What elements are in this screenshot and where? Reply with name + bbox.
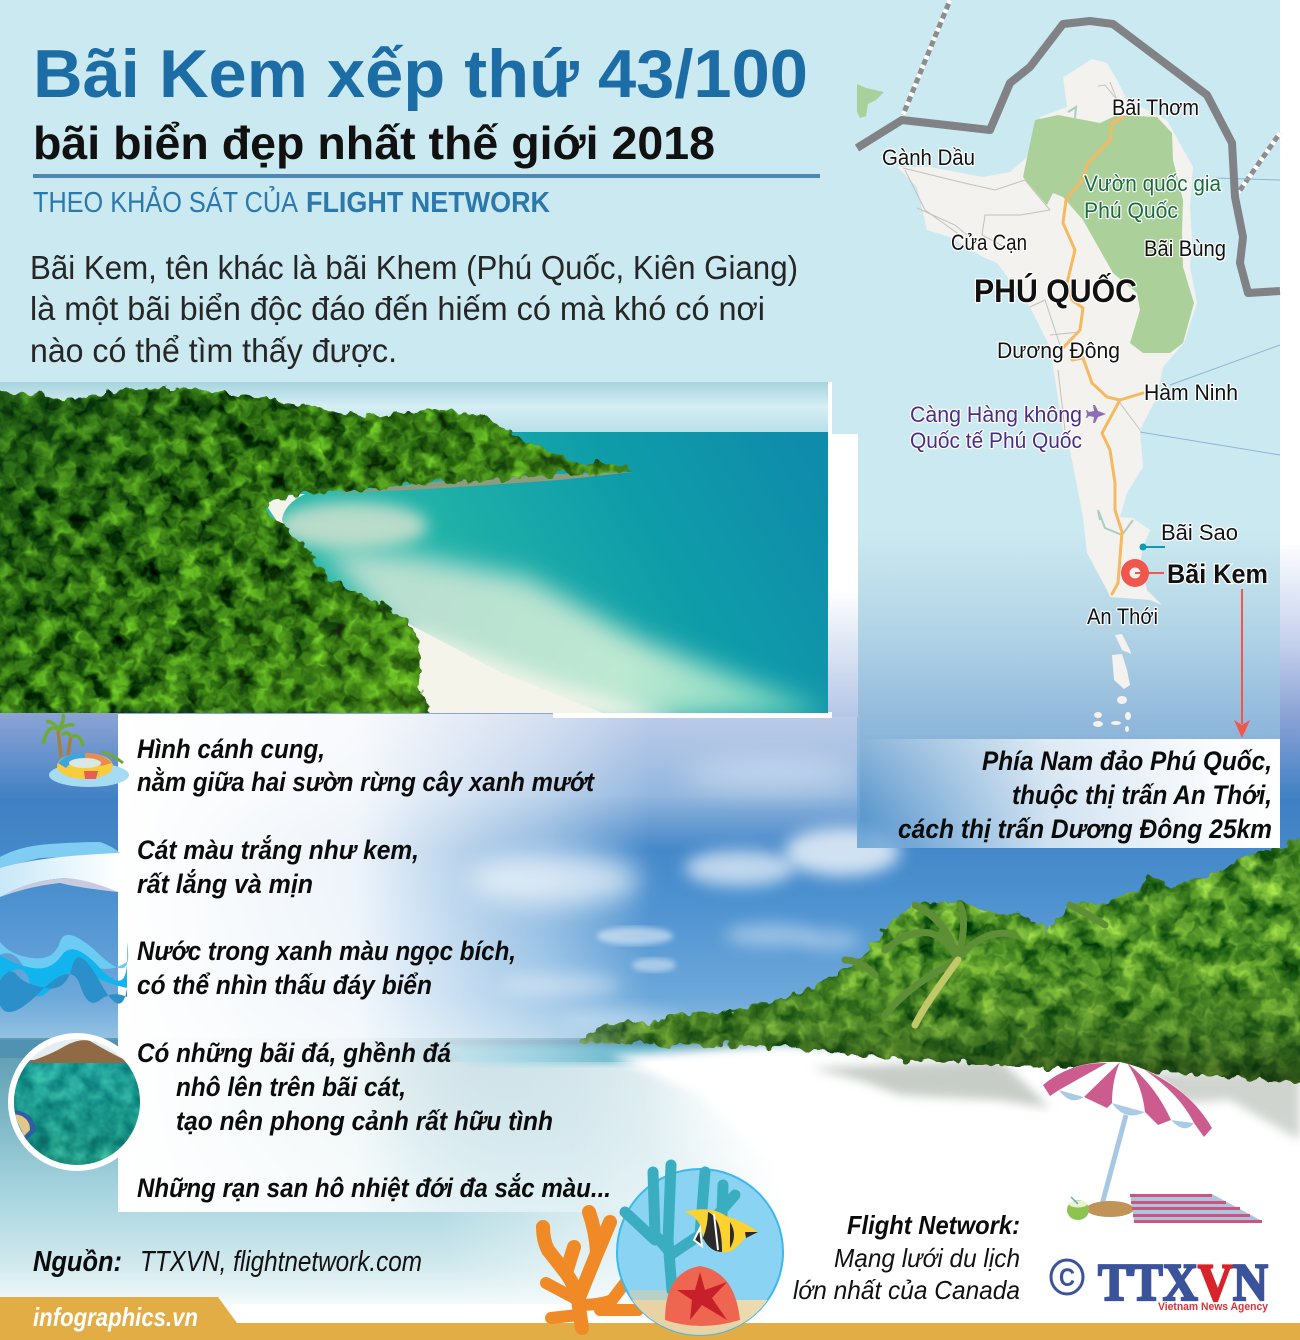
- intro text: [30, 249, 798, 369]
- text: feature list: [137, 734, 611, 1203]
- shallow water: [276, 502, 828, 720]
- text: feature list: có thể nhìn thấu đáy biển: [137, 970, 432, 1000]
- canopy: [1043, 1062, 1212, 1137]
- map labels: Quốc tế Phú Quốc: [910, 428, 1082, 453]
- background: sky and beach photo: [0, 540, 1300, 1320]
- text: Flight Network note: [793, 1210, 1020, 1305]
- subtitle: bãi biển đẹp nhất thế giới 2018: [33, 117, 715, 169]
- border line: [857, 21, 1280, 293]
- white sand beach: [620, 1090, 1300, 1320]
- palm trees: [845, 905, 1105, 1025]
- coconut: [1067, 1197, 1089, 1220]
- text: feature list: Có những bãi đá, ghềnh đá: [137, 1038, 451, 1068]
- marker: Bãi Kem: Bãi Kem: [1167, 559, 1268, 589]
- white frame behind photo: [553, 382, 858, 718]
- icon: airplane: [1086, 405, 1106, 423]
- small island: [857, 84, 884, 118]
- towel: [1086, 1194, 1262, 1223]
- minor roads and rivers: [903, 82, 1140, 535]
- source: [33, 1246, 422, 1278]
- footer bar: [0, 1297, 1300, 1340]
- map: Phú Quốc island: [857, 0, 1280, 732]
- text: feature list: nằm giữa hai sườn rừng cây xanh mướt: [137, 766, 595, 797]
- pole: [1100, 1115, 1126, 1212]
- island: [897, 59, 1197, 605]
- text: feature list: Những rạn san hô nhiệt đới đa sắc màu...: [137, 1172, 611, 1203]
- caption: location: Phía Nam đảo Phú Quốc,: [982, 746, 1272, 776]
- forest: [0, 382, 640, 722]
- icon: fish: [684, 1209, 758, 1252]
- caption: location: [857, 739, 1280, 848]
- map labels: Hàm Ninh: [1144, 380, 1238, 405]
- map labels: Bãi Bùng: [1144, 236, 1226, 261]
- arrow: [1234, 589, 1250, 738]
- canopy underside: [1059, 1090, 1194, 1128]
- map labels: [882, 95, 1238, 629]
- map labels: Dương Đông: [997, 338, 1120, 363]
- logo: TTXVN: Vietnam News Agency: [1158, 1301, 1269, 1313]
- map labels: PHÚ QUỐC: [974, 273, 1137, 309]
- caption: location: cách thị trấn Dương Đông 25km: [898, 814, 1272, 844]
- map labels: Vườn quốc gia: [1084, 171, 1222, 196]
- canopy pink panels: [1043, 1062, 1212, 1137]
- icon: beach umbrella and towel: [1043, 1062, 1262, 1223]
- map labels: Cửa Cạn: [951, 230, 1027, 255]
- southern islets: [1093, 634, 1131, 732]
- clouds: [470, 759, 900, 1030]
- icon: white sand: [0, 842, 120, 897]
- main road: [1063, 117, 1143, 594]
- text: feature list: nhô lên trên bãi cát,: [176, 1072, 406, 1102]
- source line: THEO KHẢO SÁT CỦA: [33, 185, 299, 219]
- text: feature list: Cát màu trắng như kem,: [137, 834, 419, 865]
- title: Bãi Kem xếp thứ 43/100: [33, 36, 808, 112]
- source: TTXVN, flightnetwork.com: [140, 1246, 422, 1278]
- copyright mark: [1051, 1260, 1083, 1294]
- map labels: An Thới: [1087, 604, 1158, 629]
- marker: Bãi Kem: [1121, 559, 1268, 589]
- right white strip and map background: [0, 0, 1300, 848]
- map labels: Phú Quốc: [1084, 198, 1178, 223]
- white beach: [266, 494, 610, 716]
- intro text: là một bãi biển độc đáo đến hiếm có mà khó có nơi: [30, 290, 765, 327]
- trees: [570, 825, 1300, 1090]
- text: feature list: rất lắng và mịn: [137, 868, 313, 899]
- icon: island with swim ring: [43, 715, 129, 787]
- copyright mark: C: [1059, 1264, 1075, 1292]
- red coral dome: [665, 1266, 740, 1326]
- text: Flight Network note: Flight Network:: [847, 1210, 1020, 1240]
- flight network label: FLIGHT NETWORK: [306, 187, 550, 219]
- icon: water waves: [0, 935, 128, 1012]
- sand shadows: [810, 1060, 1300, 1140]
- map labels: Bãi Sao: [1161, 520, 1238, 545]
- source: Nguồn:: [33, 1246, 122, 1278]
- icon: orange coral: [543, 1212, 638, 1328]
- rocky shoreline: [330, 472, 633, 494]
- panel: text background: [118, 714, 650, 1212]
- map labels: Càng Hàng không: [910, 402, 1082, 427]
- text: Flight Network note: Mạng lưới du lịch: [834, 1243, 1020, 1273]
- footer bar: infographics.vn: [33, 1302, 198, 1332]
- map labels: Gành Dầu: [882, 145, 975, 170]
- icon: starfish: [677, 1272, 727, 1320]
- title block: [33, 36, 820, 219]
- text: feature list: Hình cánh cung,: [137, 734, 325, 764]
- text: Flight Network note: lớn nhất của Canada: [793, 1275, 1020, 1305]
- text: feature list: tạo nên phong cảnh rất hữu tình: [176, 1106, 553, 1136]
- swim ring: [57, 753, 113, 779]
- logo: TTXVN: TTXVN: [1098, 1254, 1268, 1312]
- intro text: nào có thể tìm thấy được.: [30, 332, 397, 369]
- text: feature list: Nước trong xanh màu ngọc bích,: [137, 936, 516, 966]
- dashed boundaries: [903, 0, 1280, 455]
- icon: coral reef circle: [617, 1165, 785, 1340]
- blue coral: [625, 1165, 735, 1290]
- marker: Bãi Sao: [1140, 544, 1165, 550]
- intro text: Bãi Kem, tên khác là bãi Khem (Phú Quốc, Kiên Giang): [30, 249, 798, 286]
- sea: [0, 1038, 1000, 1308]
- photo: aerial view of Bãi Kem: [0, 382, 828, 722]
- map labels: Bãi Thơm: [1112, 95, 1199, 120]
- national park: [1023, 115, 1194, 353]
- icon: rocky coast circle photo: [8, 1033, 146, 1171]
- caption: location: thuộc thị trấn An Thới,: [1012, 780, 1272, 810]
